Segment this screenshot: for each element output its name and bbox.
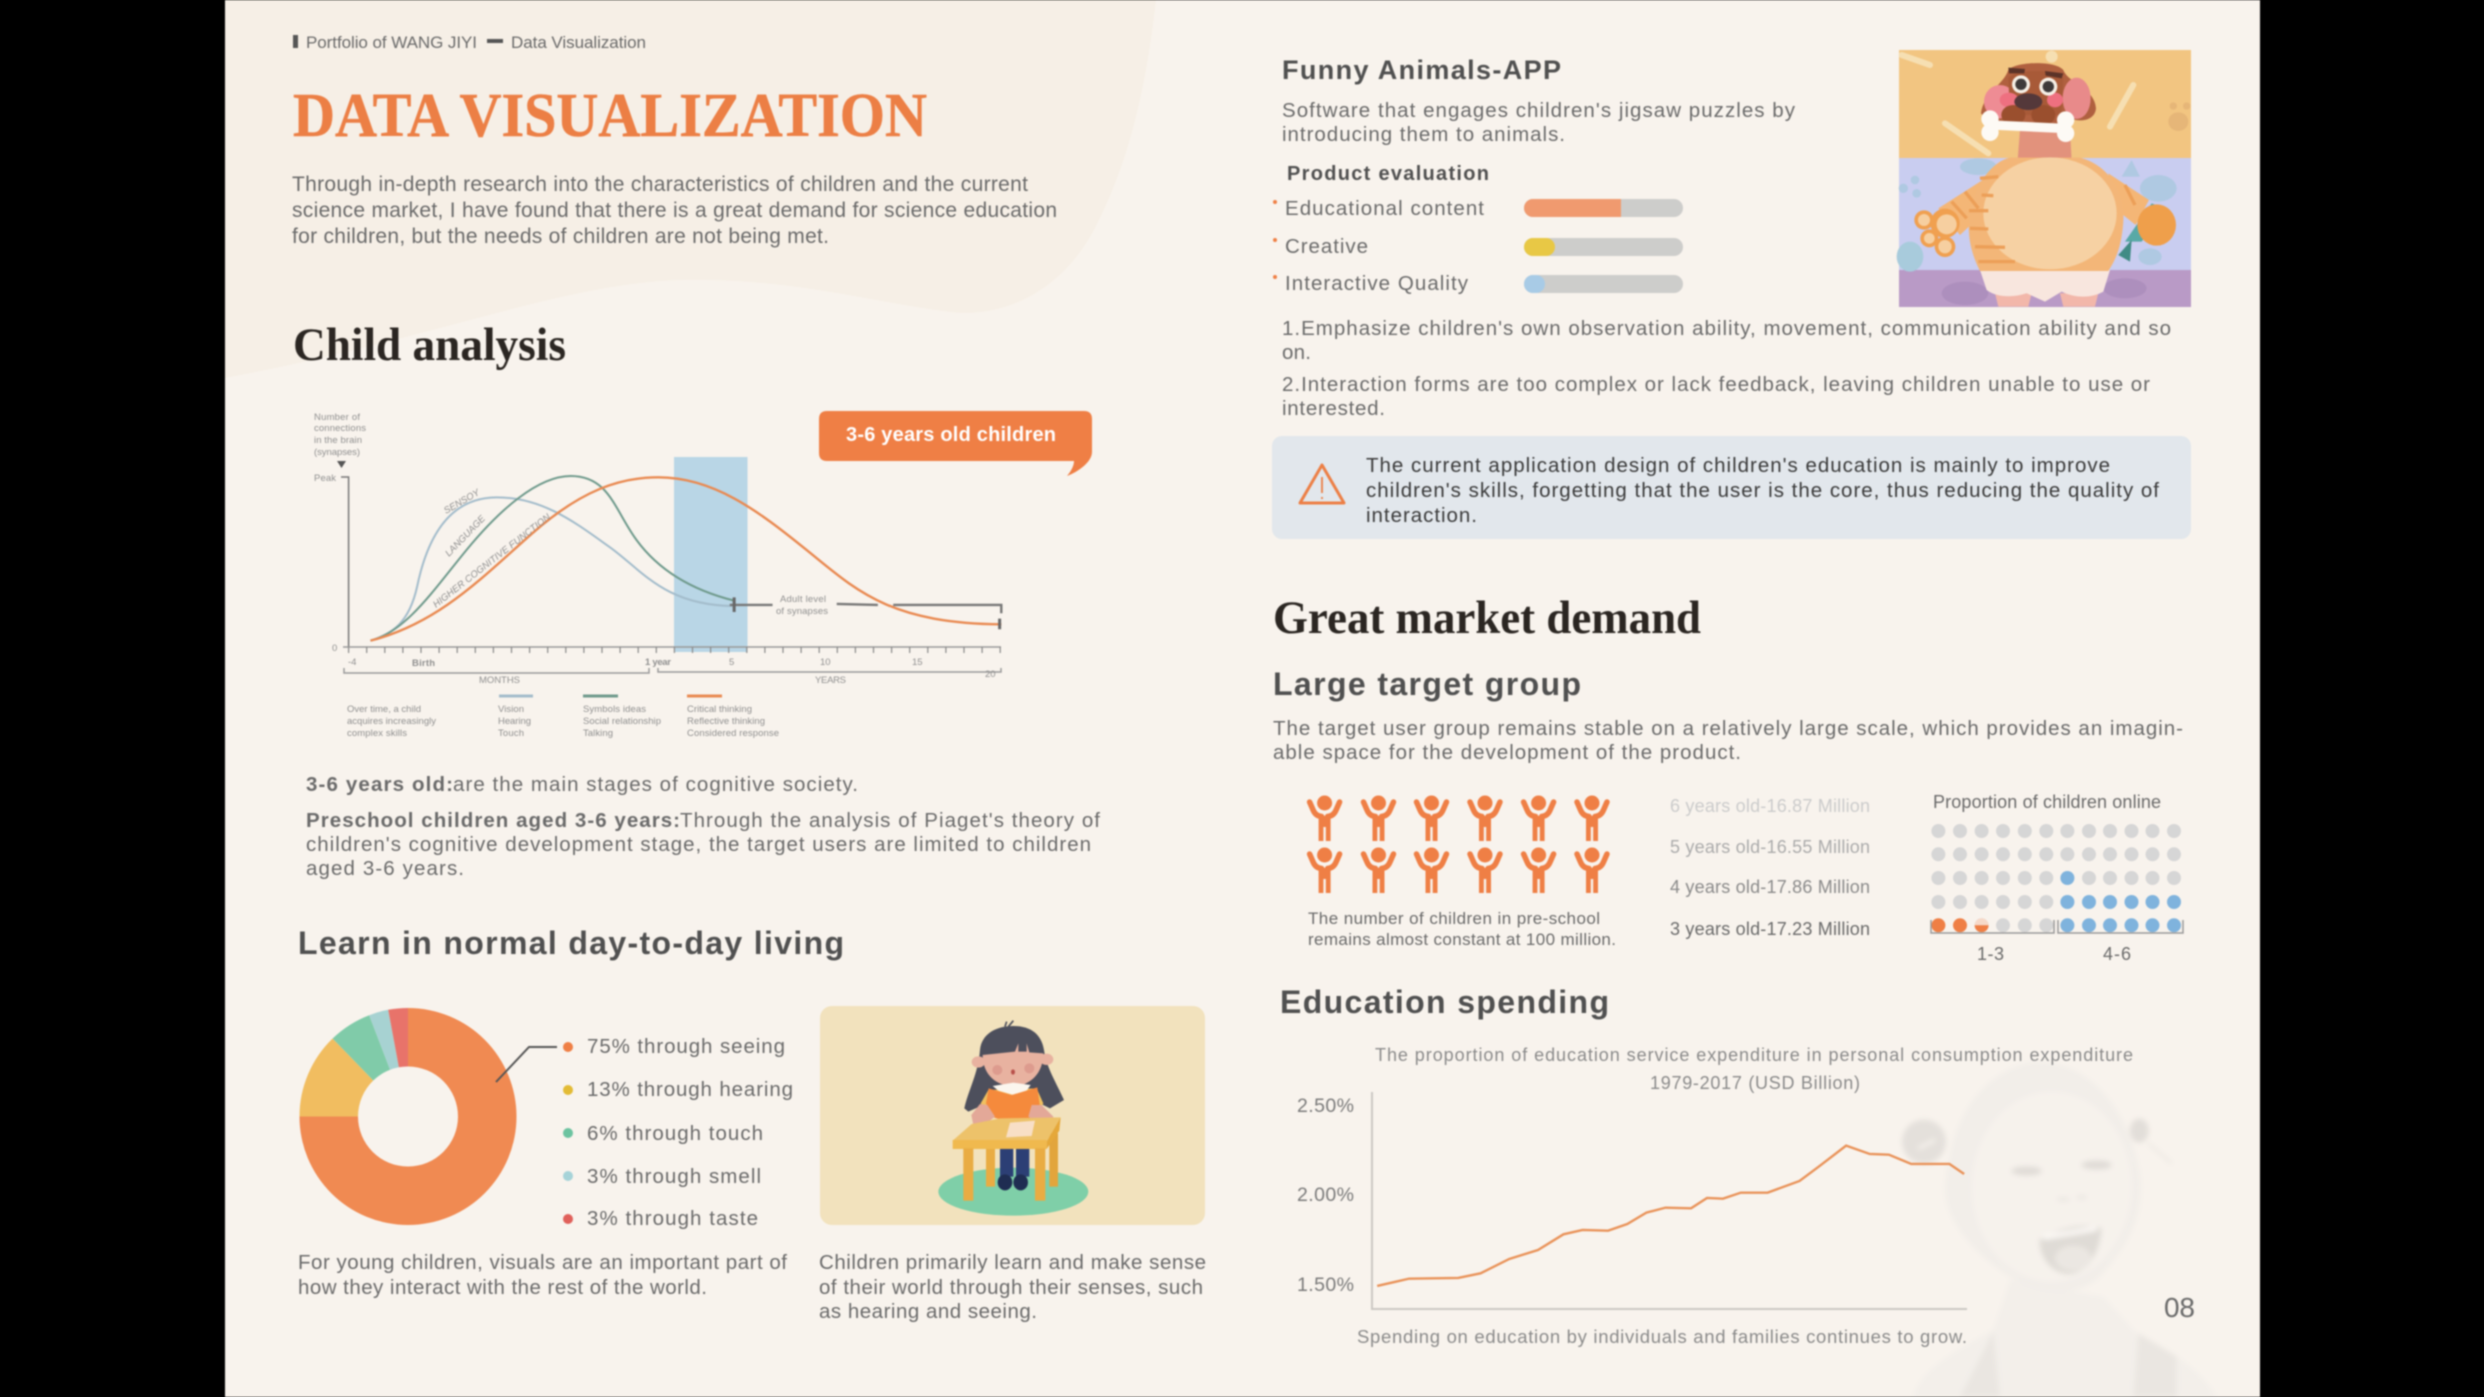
axis labels: 10: [820, 657, 831, 668]
line chart: education expenditure: The proportion of education service expenditure in personal consumption expenditure: [1375, 1045, 2133, 1065]
chart caption: Spending on education by individuals and families continues to grow.: [1357, 1326, 1967, 1347]
rating: creative: Creative: [1285, 235, 1368, 258]
axis labels: Birth: [412, 658, 435, 669]
donut legend: 3% through smell: [587, 1165, 761, 1188]
numbered findings: [1282, 317, 2171, 420]
warning callout: [1272, 436, 2191, 539]
child analysis text: Through the analysis of Piaget's theory of: [680, 809, 1100, 832]
line chart: education expenditure: [1297, 1045, 2133, 1310]
caption: senses: [819, 1251, 1206, 1323]
warning text: [1366, 454, 2159, 527]
curve labels: HIGHER COGNITIVE FUNCTION: [431, 512, 553, 610]
axis labels: 5: [729, 657, 734, 668]
axis labels: in the brain: [314, 435, 362, 446]
warning text: The current application design of children's education is mainly to improve: [1366, 454, 2110, 477]
bone: [1992, 125, 2062, 128]
child analysis text: Preschool children aged 3-6 years:: [306, 809, 680, 832]
chart legend: Hearing: [498, 716, 531, 727]
line chart: education expenditure: 2.50%: [1297, 1095, 1354, 1117]
numbered findings: 1.Emphasize children's own observation ability, movement, communication ability and so: [1282, 317, 2171, 340]
heading: large target group: Large target group: [1273, 666, 1581, 702]
child analysis text: are the main stages of cognitive society.: [453, 773, 858, 796]
caption: senses: of their world through their senses, such: [819, 1276, 1203, 1299]
chart legend: Touch: [498, 728, 524, 739]
target group text: [1273, 717, 2183, 764]
brain development chart: [314, 412, 1001, 739]
child analysis text: children's cognitive development stage, the target users are limited to children: [306, 833, 1091, 856]
chart legend: acquires increasingly: [347, 716, 436, 727]
chart legend: Vision: [498, 704, 524, 715]
chart legend: Reflective thinking: [687, 716, 765, 727]
highlighted 3-6 years band: [674, 457, 748, 652]
caption: senses: as hearing and seeing.: [819, 1300, 1037, 1323]
pictogram caption: The number of children in pre-school: [1308, 909, 1600, 928]
illustration: animal jigsaw: [1897, 50, 2191, 307]
population by age: 6 years old-16.87 Million: [1670, 796, 1870, 816]
population by age: 5 years old-16.55 Million: [1670, 837, 1870, 857]
axis labels: connections: [314, 423, 366, 434]
rating: interactive quality: [1273, 272, 1683, 295]
breadcrumb: Data Visualization: [511, 33, 646, 52]
caption: visuals: [298, 1251, 787, 1299]
dot matrix: proportion of children online: [1931, 792, 2183, 964]
icon: warning triangle: [1300, 465, 1344, 503]
caption: visuals: For young children, visuals are an important part of: [298, 1251, 787, 1274]
population by age: 3 years old-17.23 Million: [1670, 919, 1870, 939]
curves: [371, 476, 1001, 641]
target group text: The target user group remains stable on a relatively large scale, which provides an imagin-: [1273, 717, 2183, 740]
curve labels: LANGUAGE: [443, 513, 488, 559]
target group text: able space for the development of the product.: [1273, 741, 1741, 764]
intro text: Through in-depth research into the characteristics of children and the current: [292, 173, 1028, 196]
chart legend: Symbols ideas: [583, 704, 646, 715]
caption: senses: Children primarily learn and make sense: [819, 1251, 1206, 1274]
page number: 08: [2164, 1292, 2195, 1323]
curve labels: SENSOY: [442, 487, 482, 517]
numbered findings: interested.: [1282, 397, 1385, 420]
breadcrumb: Portfolio of WANG JIYI: [306, 33, 477, 52]
rating: creative: [1273, 235, 1683, 258]
axis labels: -4: [348, 657, 356, 668]
intro text: for children, but the needs of children are not being met.: [292, 225, 829, 248]
heading: education spending: Education spending: [1280, 984, 1609, 1020]
population by age: 4 years old-17.86 Million: [1670, 877, 1870, 897]
heading: great market demand: Great market demand: [1273, 592, 1701, 644]
child photo watermark: [1902, 1062, 2217, 1397]
donut legend: 13% through hearing: [587, 1078, 793, 1101]
heading: child analysis: Child analysis: [293, 319, 566, 371]
head: [1945, 1062, 2141, 1292]
heading: funny animals app: Funny Animals-APP: [1282, 55, 1561, 85]
axis labels: MONTHS: [479, 675, 520, 686]
axis labels: of synapses: [776, 606, 828, 617]
child analysis text: 3-6 years old:: [306, 773, 453, 796]
axes: [341, 477, 1001, 673]
line chart: education expenditure: 2.00%: [1297, 1184, 1354, 1206]
product evaluation: [1273, 163, 1683, 295]
intro text: [292, 173, 1057, 248]
dot matrix: proportion of children online: 1-3: [1977, 944, 2004, 964]
shoulders and dress: [1913, 1280, 2217, 1397]
axis labels: 1 year: [645, 657, 671, 668]
title: DATA VISUALIZATION: [293, 82, 927, 150]
rating: educational content: Educational content: [1285, 197, 1484, 220]
chart legend: Over time, a child: [347, 704, 421, 715]
background blob: [225, 0, 1156, 378]
chart legend: Critical thinking: [687, 704, 752, 715]
heading: learn in normal day-to-day living: Learn in normal day-to-day living: [298, 925, 844, 961]
chart legend: Considered response: [687, 728, 779, 739]
dot matrix: proportion of children online: 4-6: [2103, 944, 2131, 964]
axis labels: Peak: [314, 473, 336, 484]
warning text: interaction.: [1366, 504, 1477, 527]
background motifs: [1902, 55, 2133, 153]
pictogram caption: [1308, 909, 1616, 949]
head: [1981, 63, 2096, 128]
chart legend: [347, 694, 779, 739]
chart legend: complex skills: [347, 728, 407, 739]
leader line: [496, 1047, 557, 1082]
people pictogram: [1310, 796, 1607, 893]
rating: educational content: [1273, 197, 1683, 220]
arms: [1938, 170, 1998, 235]
callout: 3-6 years old children: 3-6 years old children: [846, 424, 1056, 446]
child analysis text: aged 3-6 years.: [306, 857, 464, 880]
axis labels: (synapses): [314, 447, 360, 458]
caption: visuals: how they interact with the rest of the world.: [298, 1276, 707, 1299]
callout: 3-6 years old children: [819, 411, 1092, 476]
legs and fur: [1995, 293, 2098, 307]
app description: [1282, 99, 1796, 146]
rating: interactive quality: Interactive Quality: [1285, 272, 1469, 295]
app description: Software that engages children's jigsaw puzzles by: [1282, 99, 1796, 122]
illustration: girl reading at desk: [820, 1006, 1205, 1225]
population by age: [1670, 796, 1870, 939]
donut legend: 6% through touch: [587, 1122, 763, 1145]
numbered findings: on.: [1282, 341, 1311, 364]
torso: [1969, 158, 2123, 271]
app description: introducing them to animals.: [1282, 123, 1565, 146]
line chart: education expenditure: 1.50%: [1297, 1274, 1354, 1296]
numbered findings: 2.Interaction forms are too complex or lack feedback, leaving children unable to use or: [1282, 373, 2150, 396]
axis labels: Adult level: [780, 594, 826, 605]
chart legend: Talking: [583, 728, 613, 739]
intro text: science market, I have found that there is a great demand for science education: [292, 199, 1057, 222]
donut legend: 75% through seeing: [587, 1035, 785, 1058]
donut legend: 3% through taste: [587, 1207, 758, 1230]
dot matrix: proportion of children online: Proportion of children online: [1933, 792, 2161, 812]
axis labels: YEARS: [815, 675, 846, 686]
warning text: children's skills, forgetting that the user is the core, thus reducing the quality of: [1366, 479, 2159, 502]
neck: [2018, 130, 2072, 160]
axis labels: 0: [332, 643, 337, 654]
child analysis text: [306, 773, 1100, 880]
axis labels: 15: [912, 657, 923, 668]
pictogram caption: remains almost constant at 100 million.: [1308, 930, 1616, 949]
line chart: education expenditure: 1979-2017 (USD Billion): [1650, 1073, 1860, 1093]
breadcrumb: [293, 33, 646, 52]
axis labels: [314, 412, 996, 686]
axis labels: 20: [985, 669, 996, 680]
chart legend: Social relationship: [583, 716, 661, 727]
desk: [1000, 1148, 1013, 1177]
product evaluation: Product evaluation: [1287, 163, 1489, 185]
axis labels: Number of: [314, 412, 360, 423]
donut legend: [563, 1035, 793, 1230]
donut chart: [300, 1008, 557, 1225]
